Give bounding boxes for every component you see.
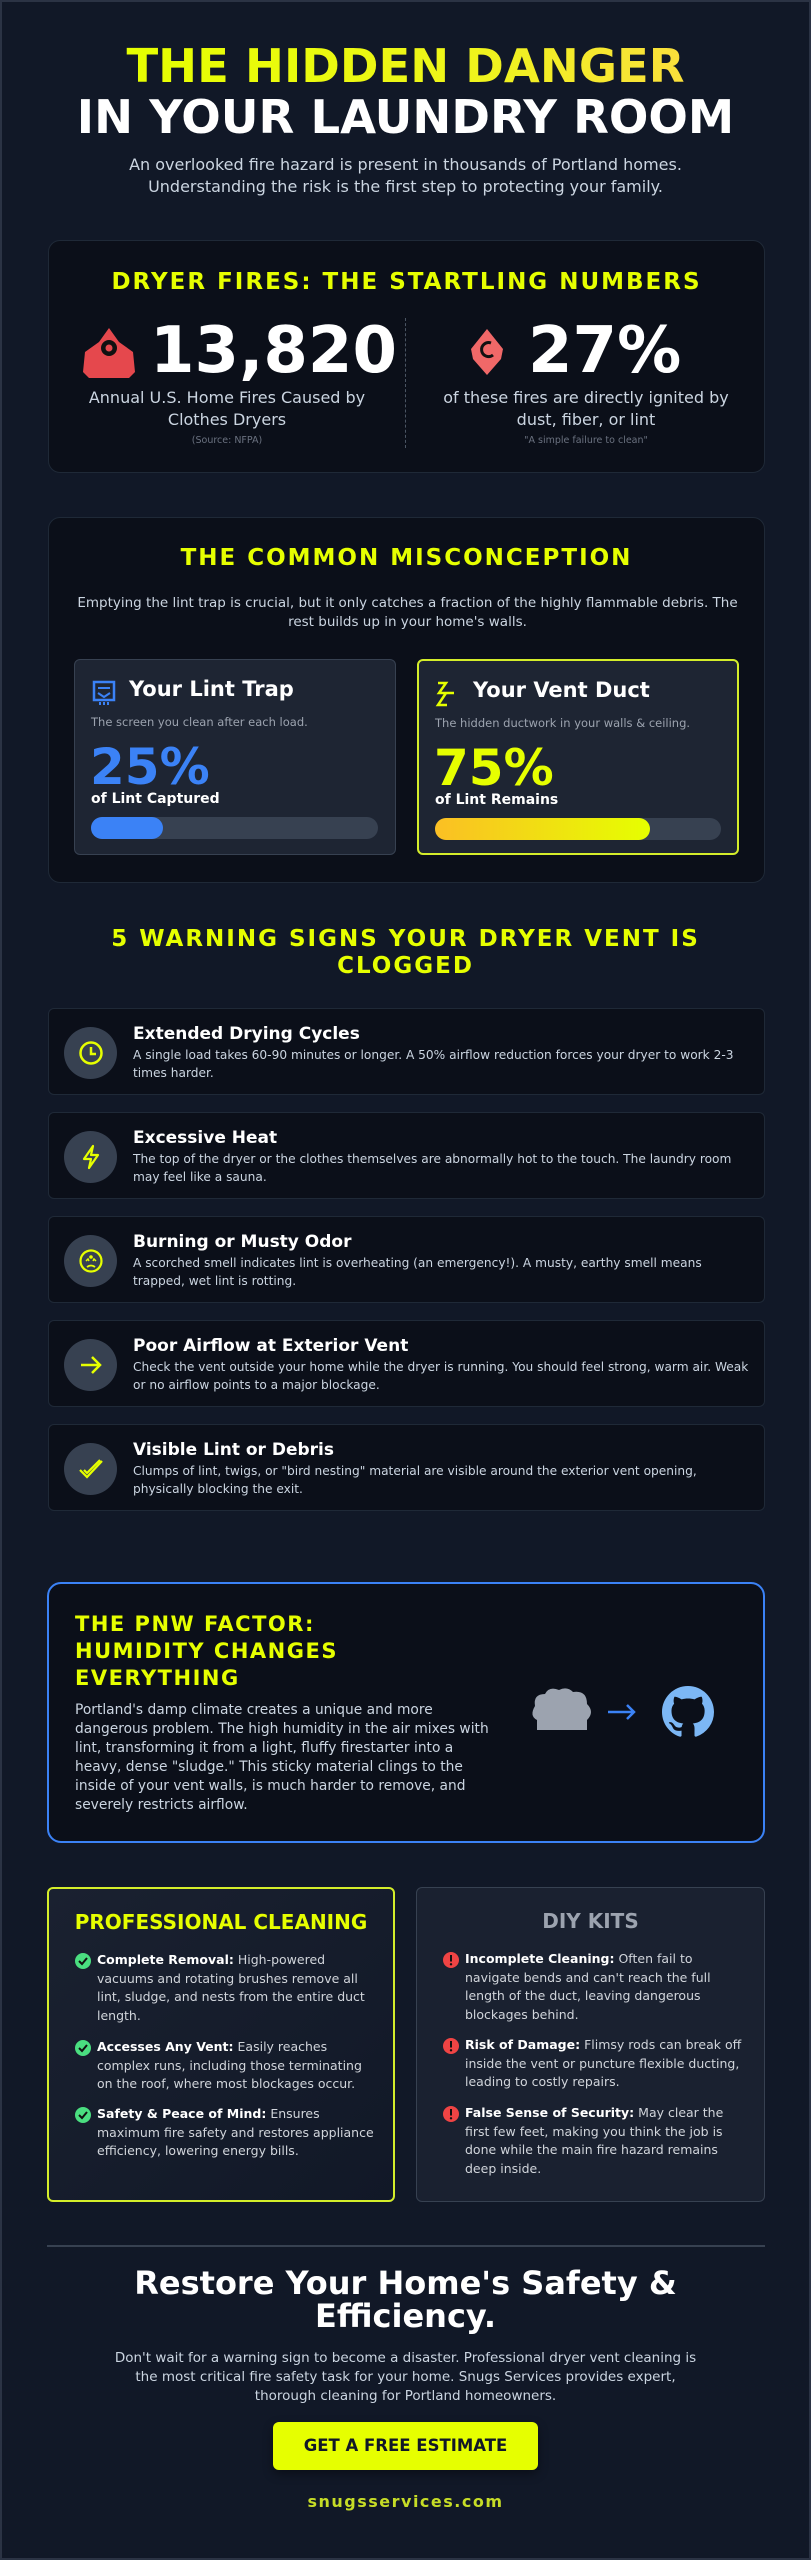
label: dust, fiber, or lint <box>517 410 655 429</box>
icon: bolt <box>64 1131 117 1183</box>
item: false security: False Sense of Security: May clear the first few feet, making you think the job is done while the main fire hazard remains deep inside. <box>465 2105 723 2176</box>
panel: DIY kits <box>416 1887 765 2202</box>
text: PNW: Portland's damp climate creates a unique and more dangerous problem. The high humidity in the air mixes with lint, transforming it from a light, fluffy firestarter into a heavy, dense "sludge." This sticky material clings to the inside of your vent walls, is much harder to remove, and severely restricts airflow. <box>75 1702 489 1813</box>
item: incomplete: Incomplete Cleaning: Often fail to navigate bends and can't reach the full length of the duct, leaving dangerous blockages behind. <box>465 1951 711 2022</box>
footer heading <box>134 2264 677 2335</box>
card: lint trap <box>74 659 396 855</box>
panel: misconception <box>48 517 765 883</box>
number: 27% <box>528 314 681 388</box>
source: (Source: NFPA) <box>192 435 262 446</box>
heading: PNW: EVERYTHING <box>75 1666 240 1690</box>
desc: The screen you clean after each load. <box>91 715 308 729</box>
label: Annual U.S. Home Fires Caused by <box>89 388 365 407</box>
heading: PNW <box>75 1612 338 1690</box>
item: damage: Risk of Damage: Flimsy rods can break off inside the vent or puncture flexible ducting, leading to costly repairs. <box>465 2037 741 2089</box>
footer text: Don't wait for a warning sign to become a disaster. Professional dryer vent cleaning is the most critical fire safety task for your home. Snugs Services provides expert, thorough cleaning for Portland homeowners. <box>115 2350 696 2404</box>
heading: startling numbers: DRYER FIRES: THE STARTLING NUMBERS <box>111 269 702 295</box>
item: safety: Safety & Peace of Mind: Ensures maximum fire safety and restores appliance efficiency, lowering energy bills. <box>97 2106 374 2158</box>
subtitle: An overlooked fire hazard is present in thousands of Portland homes. <box>129 155 682 174</box>
icon: vent duct <box>436 682 454 706</box>
warning: visible lint <box>48 1424 765 1511</box>
caption: of Lint Remains <box>435 792 558 808</box>
title: Your Lint Trap <box>129 677 294 701</box>
warning: extended drying: Extended Drying Cycles <box>133 1024 360 1044</box>
bar <box>91 817 378 839</box>
icon: lint cloud to sludge <box>532 1686 714 1737</box>
warning: extended drying <box>48 1008 765 1095</box>
warning: odor: Burning or Musty Odor <box>133 1232 352 1252</box>
warning: poor airflow <box>48 1320 765 1407</box>
footer heading: Restore Your Home's Safety & <box>134 2264 677 2302</box>
icon: clock <box>64 1027 117 1079</box>
label: of these fires are directly ignited by <box>443 388 729 407</box>
subtitle <box>129 155 682 196</box>
warning: poor airflow: Poor Airflow at Exterior Vent <box>133 1336 408 1356</box>
label: Clothes Dryers <box>168 410 286 429</box>
warning: excessive heat: The top of the dryer or the clothes themselves are abnormally hot to the touch. The laundry room may feel like a sauna. <box>133 1152 731 1184</box>
icon: check <box>64 1443 117 1495</box>
percent: 75% <box>434 739 554 797</box>
heading: warning signs: 5 WARNING SIGNS YOUR DRYER VENT IS CLOGGED <box>111 926 700 979</box>
icon: lint trap <box>92 680 116 705</box>
warning: excessive heat: Excessive Heat <box>133 1128 277 1148</box>
warning: excessive heat <box>48 1112 765 1199</box>
panel: professional cleaning <box>47 1887 395 2202</box>
warning: poor airflow: Check the vent outside your home while the dryer is running. You should feel strong, warm air. Weak or no airflow points to a major blockage. <box>133 1360 748 1392</box>
heading: professional: PROFESSIONAL CLEANING <box>75 1910 367 1934</box>
heading: misconception: THE COMMON MISCONCEPTION <box>181 545 632 571</box>
subtitle: Understanding the risk is the first step to protecting your family. <box>148 177 663 196</box>
website: snugsservices.com <box>307 2492 504 2511</box>
stat: 13,820 <box>83 314 397 446</box>
panel: PNW factor <box>47 1582 765 1843</box>
warning: odor: trapped, wet lint is rotting. <box>133 1274 296 1288</box>
item: accesses any vent: Accesses Any Vent: Easily reaches complex runs, including those terminating on the roof, where most blockages occur. <box>97 2039 362 2091</box>
panel: startling numbers <box>48 240 765 473</box>
card: vent duct <box>417 659 739 855</box>
caption: of Lint Captured <box>91 791 220 807</box>
footer heading: Efficiency. <box>315 2297 496 2335</box>
stat: 27% <box>443 314 729 446</box>
percent: 25% <box>90 738 210 796</box>
icon: flame <box>471 329 503 375</box>
button: free estimate: GET A FREE ESTIMATE <box>304 2436 507 2455</box>
warning: visible lint: Visible Lint or Debris <box>133 1440 334 1460</box>
heading: PNW: HUMIDITY CHANGES <box>75 1639 338 1663</box>
title <box>77 39 734 144</box>
title: THE HIDDEN DANGER <box>126 39 685 93</box>
warning: odor: A scorched smell indicates lint is overheating (an emergency!). A musty, earthy smell means <box>133 1256 702 1270</box>
label <box>443 388 729 429</box>
title: Your Vent Duct <box>473 678 650 702</box>
warning: odor <box>48 1216 765 1303</box>
heading: DIY: DIY KITS <box>542 1909 639 1933</box>
number: 13,820 <box>150 314 397 388</box>
button: free estimate <box>273 2422 538 2470</box>
icon: arrow <box>64 1339 117 1391</box>
item: complete removal: Complete Removal: High-powered vacuums and rotating brushes remove all lint, sludge, and nests from the entire duct length. <box>97 1952 365 2023</box>
warning: extended drying: A single load takes 60-90 minutes or longer. A 50% airflow reduction forces your dryer to work 2-3 times harder. <box>133 1048 734 1080</box>
title: IN YOUR LAUNDRY ROOM <box>77 90 734 144</box>
bar <box>435 818 721 840</box>
intro text: Emptying the lint trap is crucial, but it only catches a fraction of the highly flammable debris. The rest builds up in your home's walls. <box>77 595 738 630</box>
label <box>89 388 365 429</box>
icon: fire <box>83 328 135 378</box>
heading: PNW: THE PNW FACTOR: <box>75 1612 315 1636</box>
desc: The hidden ductwork in your walls & ceiling. <box>435 716 690 730</box>
warning: visible lint: Clumps of lint, twigs, or "bird nesting" material are visible around the exterior vent opening, physically blocking the exit. <box>133 1464 697 1496</box>
icon: face <box>64 1235 117 1287</box>
note: "A simple failure to clean" <box>524 435 648 446</box>
